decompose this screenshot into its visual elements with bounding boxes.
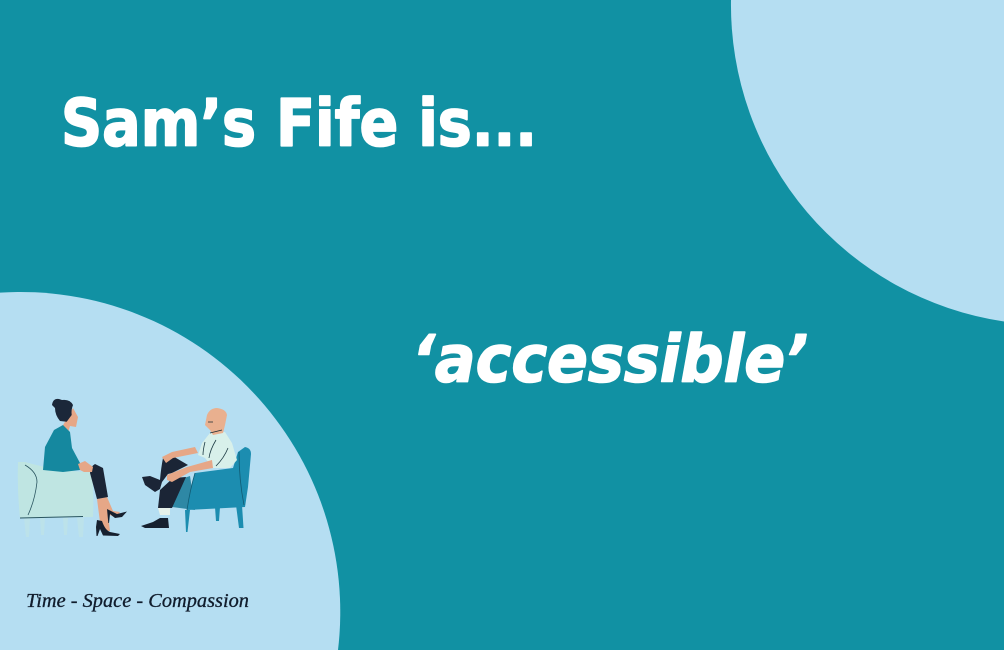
icon: blue armchair: [172, 447, 251, 532]
tagline: Time - Space - Compassion: [26, 590, 249, 612]
decorative circle: top right: [731, 0, 1004, 322]
icon: man: [141, 408, 237, 528]
decorative circle: bottom left: [0, 292, 340, 650]
title: Sam’s Fife is...: [61, 86, 537, 162]
icon: pale armchair: [18, 462, 93, 537]
icon: woman: [43, 399, 127, 536]
subtitle: accessible: ‘accessible’: [412, 322, 808, 398]
illustration: two people seated in conversation: [18, 399, 251, 537]
